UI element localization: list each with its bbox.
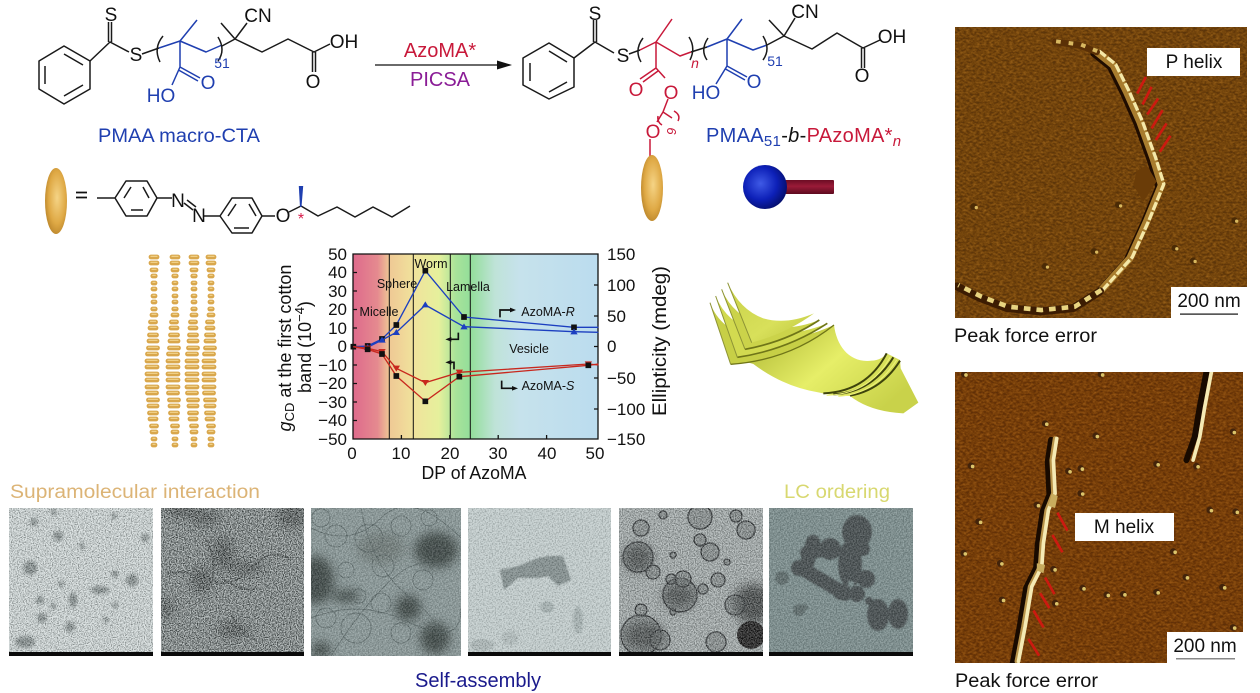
phase labels: Sphere [377, 277, 417, 291]
stereo wedge [299, 186, 303, 207]
repeat brackets [638, 37, 693, 62]
scheme: PMAA-b-PAzoMA* block copolymer structure [523, 2, 906, 221]
equals sign [76, 192, 87, 198]
scale bar: 200 nm [1171, 287, 1247, 319]
label: PMAA51-b-PAzoMA*n: 51 [764, 133, 781, 150]
reaction arrow with conditions [375, 40, 512, 91]
axis indicator arrows [445, 308, 518, 391]
label: PMAA macro-CTA: PMAA macro-CTA [98, 126, 260, 147]
data series [353, 271, 598, 401]
phase labels: Micelle [360, 305, 398, 319]
TEM image: micelles [9, 508, 153, 656]
bottom axis tick labels: 50 [586, 444, 604, 463]
bottom axis tick labels: 40 [538, 444, 556, 463]
plot background phase gradient [353, 254, 598, 439]
atom labels: S [589, 4, 601, 25]
reaction arrow with conditions: PICSA [410, 69, 471, 91]
icon: golden ellipsoid [45, 168, 67, 234]
left axis tick labels: 30 [328, 282, 347, 301]
TEM image: large aggregates [769, 508, 913, 656]
AzoMA-S ellipticity series [353, 346, 598, 386]
scale bar: 200 nm [1167, 632, 1243, 664]
scheme: mesogen definition [45, 168, 410, 234]
atom labels: 51 [214, 55, 230, 71]
reaction arrow with conditions: AzoMA* [404, 40, 476, 62]
left y axis title: ) [295, 301, 315, 307]
atom labels: O [664, 83, 678, 104]
right axis tick labels: −100 [607, 400, 645, 419]
icon: helical stack of ellipsoids [147, 256, 214, 445]
label box: P helix: P helix [1166, 52, 1223, 73]
left axis tick labels: −20 [318, 374, 347, 393]
atom labels [589, 2, 906, 143]
icon: pendant ellipsoid [641, 155, 663, 221]
series labels [521, 305, 575, 393]
atom labels: O [646, 122, 660, 143]
label: PMAA51-b-PAzoMA*n: PMAA [706, 125, 764, 147]
blue PMAA repeat unit [159, 20, 222, 85]
left y axis title: g [275, 421, 295, 431]
blue PMAA block [707, 19, 767, 84]
benzene ring [39, 46, 90, 104]
atom labels: S [105, 5, 117, 26]
label: PMAA51-b-PAzoMA*n: n [893, 133, 901, 150]
red PAzoMA block [640, 19, 691, 157]
left axis tick labels: 50 [328, 245, 347, 264]
label: Supramolecular interaction: Supramolecular interaction [10, 482, 260, 503]
phase boundaries [389, 254, 470, 439]
phase labels: Vesicle [509, 342, 549, 356]
label: Self-assembly: Self-assembly [415, 670, 541, 692]
helix fibres and surface particles [960, 372, 1240, 663]
axes frame and ticks [353, 254, 598, 439]
left axis tick labels: −50 [318, 430, 347, 449]
AFM image: M helix [955, 372, 1243, 664]
scale bar: 200 nm: 200 nm [1177, 291, 1241, 312]
atom labels: 51 [767, 53, 783, 69]
atom labels: OH [878, 27, 906, 48]
repeat brackets [157, 36, 222, 62]
right axis tick labels: −150 [607, 430, 645, 449]
right axis tick labels: −50 [607, 369, 636, 388]
AzoMA-S gCD series [353, 347, 598, 401]
atom labels: O [629, 80, 643, 101]
label: LC ordering: LC ordering [784, 482, 890, 503]
atom labels: O [201, 73, 215, 94]
caption: Peak force error: Peak force error [955, 671, 1099, 692]
atom labels: HO [692, 83, 720, 104]
AFM image: P helix [955, 27, 1247, 319]
hexyl spacer brackets [658, 111, 679, 125]
atom labels: O [747, 72, 761, 93]
left axis tick labels: −10 [318, 356, 347, 375]
atom labels: S [617, 46, 629, 67]
right axis tick labels: 100 [607, 276, 635, 295]
TEM image: worm network [311, 508, 461, 656]
atom labels: S [130, 45, 142, 66]
x axis title: DP of AzoMA [422, 463, 526, 483]
right axis tick labels [607, 245, 645, 449]
bottom axis tick labels: 0 [347, 444, 357, 463]
atom labels: OH [330, 32, 358, 53]
azobenzene rings and tail [97, 181, 410, 233]
atom labels: n [691, 55, 699, 71]
dithioester and trailing bonds [90, 22, 330, 72]
left y axis title: −4 [292, 307, 307, 322]
atom labels [171, 191, 304, 228]
benzene ring [523, 43, 574, 99]
bottom axis tick labels: 10 [392, 444, 410, 463]
AzoMA-R gCD series [353, 271, 598, 347]
atom labels [105, 5, 358, 107]
left y axis title: CD [282, 403, 297, 421]
atom labels: O [855, 66, 869, 87]
series labels: AzoMA-S [522, 379, 575, 393]
scale bar: 200 nm: 200 nm [1173, 636, 1237, 657]
atom labels: N [171, 191, 185, 212]
dithioester and trailing bonds [574, 18, 880, 68]
scheme: PMAA macro-CTA structure [39, 5, 358, 107]
phase labels: Lamella [446, 280, 490, 294]
left axis tick labels: 20 [328, 300, 347, 319]
TEM image: worms [161, 508, 304, 656]
left y axis title: band (10 [295, 322, 315, 393]
bottom axis tick labels: 20 [441, 444, 459, 463]
TEM image: lamella [468, 508, 611, 656]
helix fibre and surface particles [955, 38, 1238, 496]
right axis tick labels: 50 [607, 307, 626, 326]
atom labels: HO [147, 86, 175, 107]
atom labels: 6 [664, 127, 679, 135]
TEM image: vesicles [619, 508, 763, 656]
label box: M helix [1075, 513, 1174, 541]
caption: Peak force error: Peak force error [954, 326, 1098, 347]
right axis tick labels: 150 [607, 245, 635, 264]
left axis tick labels: 40 [328, 263, 347, 282]
label box: M helix: M helix [1094, 517, 1155, 538]
left axis tick labels: 0 [338, 337, 347, 356]
right y axis title: Ellipticity (mdeg) [650, 266, 671, 416]
AzoMA-R ellipticity series [353, 301, 598, 350]
red helical pitch marks [1028, 513, 1067, 656]
atom labels: O [276, 206, 290, 227]
label: PMAA51-b-PAzoMA*n: b-PAzoMA* [788, 125, 893, 147]
icon: ball-and-stick block copolymer [743, 165, 834, 209]
left axis tick labels: −30 [318, 393, 347, 412]
bottom axis tick labels: 30 [489, 444, 507, 463]
label box: P helix [1147, 48, 1240, 76]
atom labels: CN [791, 2, 819, 23]
phase labels [360, 257, 549, 356]
atom labels: CN [244, 6, 272, 27]
series labels: AzoMA-R [521, 305, 575, 319]
chart: gCD and ellipticity vs DP of AzoMA [275, 245, 671, 483]
icon: twisted helical ribbon stack [710, 283, 918, 413]
left y axis title [275, 265, 315, 431]
right axis tick labels: 0 [607, 337, 616, 356]
red helical pitch marks [1137, 77, 1171, 152]
label: PMAA51-b-PAzoMA*n: - [781, 125, 788, 147]
phase labels: Worm [414, 257, 448, 271]
left axis tick labels [318, 245, 347, 449]
atom labels: N [192, 206, 206, 227]
left y axis title: at the first cotton [275, 265, 295, 403]
left axis tick labels: −40 [318, 411, 347, 430]
bottom axis tick labels [347, 444, 604, 463]
atom labels: * [298, 211, 304, 228]
atom labels: O [306, 72, 320, 93]
left axis tick labels: 10 [328, 319, 347, 338]
repeat brackets, PMAA block [704, 36, 767, 60]
